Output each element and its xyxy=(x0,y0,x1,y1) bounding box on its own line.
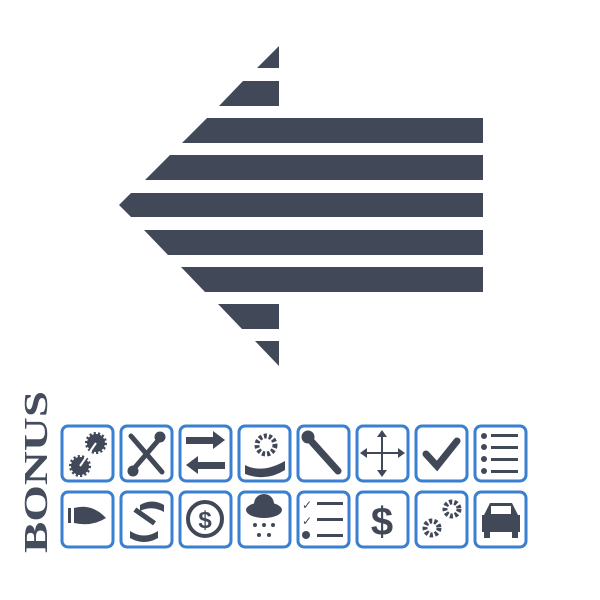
icon: exchange arrows xyxy=(186,431,225,474)
icon: hand with gear xyxy=(245,436,285,477)
icon: wrench xyxy=(303,432,338,471)
icon: gears xyxy=(425,502,459,535)
BONUS label: BONUS xyxy=(18,391,55,553)
icon: move arrows xyxy=(360,430,405,477)
icon: rain cloud xyxy=(246,494,282,537)
icon: list xyxy=(481,433,518,474)
icon: hand xyxy=(68,507,106,524)
icon: checklist xyxy=(302,498,343,539)
icon: tools xyxy=(129,433,164,475)
icon: hands with wrench xyxy=(130,502,164,542)
icon: checklist: ✓ xyxy=(302,514,312,528)
icon: dollar coin: $ xyxy=(198,507,212,534)
arrow: striped left arrow xyxy=(119,46,483,366)
icon: gears with arrows xyxy=(71,434,105,475)
icon: checklist: ✓ xyxy=(302,498,312,512)
icon: check xyxy=(426,441,457,466)
icon: dollar: $ xyxy=(371,500,393,544)
icon: car xyxy=(482,503,520,538)
icon: dollar coin xyxy=(188,502,222,536)
bonus icon grid xyxy=(62,426,526,547)
